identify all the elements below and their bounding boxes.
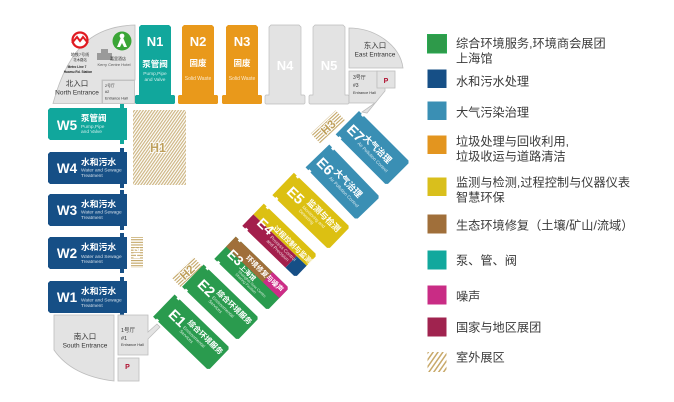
- legend: environmental services: 综合环境服务,环境商会展团: [456, 36, 606, 50]
- brown segment: [226, 237, 272, 282]
- hall W2: W2: [57, 246, 77, 261]
- entrance hall 1: 1号厅: [121, 327, 136, 334]
- legend: air pollution: 大气污染治理: [456, 104, 529, 120]
- hall W1: [48, 277, 127, 317]
- legend: waste: 垃圾收运与道路清洁: [456, 148, 566, 164]
- hall W2: Water and Sewage: [81, 254, 122, 260]
- hall E3: [214, 237, 289, 310]
- hall E1: [153, 294, 230, 370]
- north entrance label: [55, 79, 99, 96]
- legend: pumps: [428, 250, 517, 270]
- hall E2: E2: [194, 277, 218, 301]
- metro label: [64, 51, 92, 74]
- hall W4: Water and Sewage: [81, 168, 122, 174]
- hall E7: Air Pollution Control: [357, 141, 389, 173]
- legend: water treatment: [428, 70, 529, 88]
- south entrance: [54, 315, 114, 381]
- hall N3: N3: [234, 34, 250, 49]
- entrance hall 3: [349, 71, 385, 113]
- hall N5: N5: [321, 58, 337, 73]
- hall E2: [182, 264, 259, 340]
- hall E5: [272, 173, 350, 249]
- entrance hall 1: Entrance Hall: [121, 343, 144, 347]
- entrance hall 3: 3号厅: [353, 75, 366, 81]
- hall E4: Process Control: [268, 235, 297, 263]
- parking south: [118, 358, 139, 381]
- legend: noise: [428, 286, 480, 304]
- hall E1: E1: [165, 307, 189, 331]
- hall W2: [48, 233, 127, 273]
- icon: metro logo: [72, 32, 88, 48]
- hall E3: Sharing Pavilion: [234, 273, 257, 295]
- hall E4: [242, 204, 317, 278]
- metro label: Huamu Rd. Station: [64, 70, 92, 74]
- hall N1: N1: [147, 34, 163, 49]
- hall E4: 过程控制与监测: [271, 224, 314, 265]
- east entrance: [349, 28, 403, 68]
- hall N4: [265, 25, 305, 104]
- hall W5: [48, 104, 127, 144]
- metro label: 花木路站: [73, 57, 87, 62]
- hall N4: N4: [277, 58, 294, 73]
- hall E2: 综合环境服务: [215, 288, 255, 327]
- hall W3: [48, 190, 127, 230]
- outdoor area H3 diagonal: H3: [318, 117, 339, 138]
- legend: outdoor: [428, 350, 505, 372]
- hall W3: Water and Sewage: [81, 210, 122, 216]
- hall N2: N2: [190, 34, 206, 49]
- icon: hotel: [112, 32, 132, 50]
- hall E1: Environmental: [182, 325, 206, 349]
- east entrance: East Entrance: [355, 52, 396, 58]
- legend: noise: 噪声: [456, 290, 480, 304]
- outdoor area H2 diagonal: H2: [177, 262, 198, 283]
- entrance hall 2: #2: [105, 90, 109, 94]
- hall W3: 水和污水: [81, 198, 116, 209]
- hall E5: 监测与检测: [305, 197, 343, 234]
- hall W4: Treatment: [81, 173, 103, 179]
- hall N1: 泵管阀: [142, 59, 168, 69]
- outdoor area H1: H1: [150, 141, 166, 155]
- hall W1: Water and Sewage: [81, 298, 122, 304]
- hall W5: Pump,Pipe: [81, 124, 105, 130]
- hotel label: [97, 55, 131, 67]
- hall E5: Detecting: [298, 208, 315, 226]
- south entrance: 南入口: [74, 331, 96, 341]
- hall E6: [306, 144, 380, 220]
- north entrance: [53, 25, 135, 104]
- hall N2: [178, 25, 218, 104]
- legend: waste: [428, 134, 569, 164]
- hall N1: and Valve: [145, 77, 166, 83]
- hall W4: 水和污水: [81, 156, 116, 167]
- north entrance label: 北入口: [66, 79, 88, 88]
- legend: remediation: 生态环境修复（土壤/矿山/流域）: [456, 218, 633, 232]
- outdoor area H1: [133, 110, 186, 185]
- legend: remediation: [428, 214, 633, 234]
- entrance hall 3: Entrance Hall: [353, 91, 376, 95]
- hall E3: 上海馆: [238, 263, 258, 283]
- legend: water treatment: 水和污水处理: [456, 74, 529, 88]
- hall E7: E7: [343, 122, 367, 146]
- hall E4: E4: [254, 215, 278, 238]
- hall N3: [222, 25, 262, 104]
- south entrance: South Entrance: [63, 342, 108, 350]
- hall N5: [309, 25, 349, 104]
- outdoor area H3 diagonal: [311, 110, 346, 144]
- pink segment: [263, 272, 289, 298]
- legend: monitoring: [428, 174, 630, 204]
- parking south: P: [125, 364, 130, 371]
- legend: air pollution: [428, 102, 529, 120]
- metro label: Metro Line 7: [68, 65, 87, 69]
- hall N3: 固废: [233, 58, 251, 68]
- hall N2: 固废: [189, 58, 207, 68]
- outdoor area H2 vertical: [131, 237, 143, 268]
- legend: pumps: 泵、管、阀: [456, 252, 517, 268]
- entrance hall 1: #1: [121, 336, 127, 342]
- entrance hall 2: Entrance Hall: [105, 96, 128, 100]
- hall W4: W4: [57, 161, 78, 176]
- legend: national pavilions: [428, 318, 541, 336]
- entrance hall 1: [118, 315, 160, 355]
- metro label: 地铁7号线: [71, 51, 89, 57]
- hall E4: and Precision: [265, 239, 290, 263]
- legend: waste: 垃圾处理与回收利用,: [456, 134, 569, 148]
- icon: hotel building: [97, 49, 112, 60]
- entrance hall 2: 2号厅: [105, 83, 115, 88]
- hall N1: Pump,Pipe: [143, 71, 167, 77]
- hall W5: 泵管阀: [81, 113, 107, 123]
- hall E3: E3: [224, 247, 247, 269]
- hall N3: Solid Waste: [229, 76, 255, 82]
- outdoor area H2 vertical: H2: [132, 247, 142, 259]
- legend: monitoring: 智慧环保: [456, 190, 505, 204]
- hall W5: W5: [57, 118, 78, 133]
- hall W2: Treatment: [81, 259, 103, 265]
- hall E2: Services: [207, 299, 224, 315]
- hall N2: Solid Waste: [185, 76, 211, 82]
- entrance hall 2: [102, 80, 134, 104]
- parking east: [377, 71, 395, 88]
- entrance hall 3: #3: [353, 83, 359, 89]
- legend: national pavilions: 国家与地区展团: [456, 320, 541, 334]
- hall E1: 综合环境服务: [186, 318, 226, 357]
- hall N1: [135, 25, 175, 104]
- hall W2: 水和污水: [81, 241, 116, 252]
- outdoor area H2 diagonal: [172, 257, 203, 288]
- hall E6: Air Pollution Control: [328, 176, 360, 208]
- hall E6: E6: [313, 155, 336, 179]
- hall E7: 大气治理: [361, 132, 394, 165]
- hall E7: [336, 111, 410, 185]
- hall W3: W3: [57, 203, 78, 218]
- hotel label: 嘉里酒店: [110, 55, 126, 61]
- hall E6: 大气治理: [332, 166, 365, 200]
- parking east: P: [384, 78, 389, 85]
- hotel label: Kerry Centre Hotel: [97, 62, 131, 67]
- legend: environmental services: [428, 34, 606, 66]
- north entrance label: North Entrance: [55, 90, 99, 96]
- hall E5: Monitoring and: [301, 205, 326, 229]
- hall E3: Shanghai New Centre: [237, 270, 267, 298]
- hall W1: Treatment: [81, 303, 103, 309]
- hall W1: W1: [57, 290, 78, 305]
- hall W1: 水和污水: [81, 285, 116, 296]
- hall W3: Treatment: [81, 215, 103, 221]
- east entrance: 东入口: [364, 40, 386, 50]
- hall E3: 环境修复与噪声: [244, 253, 285, 294]
- legend: [428, 34, 633, 372]
- hall W4: [48, 148, 127, 188]
- hall E2: Environmental: [211, 295, 235, 319]
- legend: environmental services: 上海馆: [456, 50, 493, 66]
- hall E1: Services: [178, 329, 195, 345]
- hall W5: and Valve: [81, 129, 102, 135]
- legend: monitoring: 监测与检测,过程控制与仪器仪表: [456, 174, 630, 190]
- legend: outdoor: 室外展区: [456, 350, 505, 364]
- hall E5: E5: [283, 184, 307, 208]
